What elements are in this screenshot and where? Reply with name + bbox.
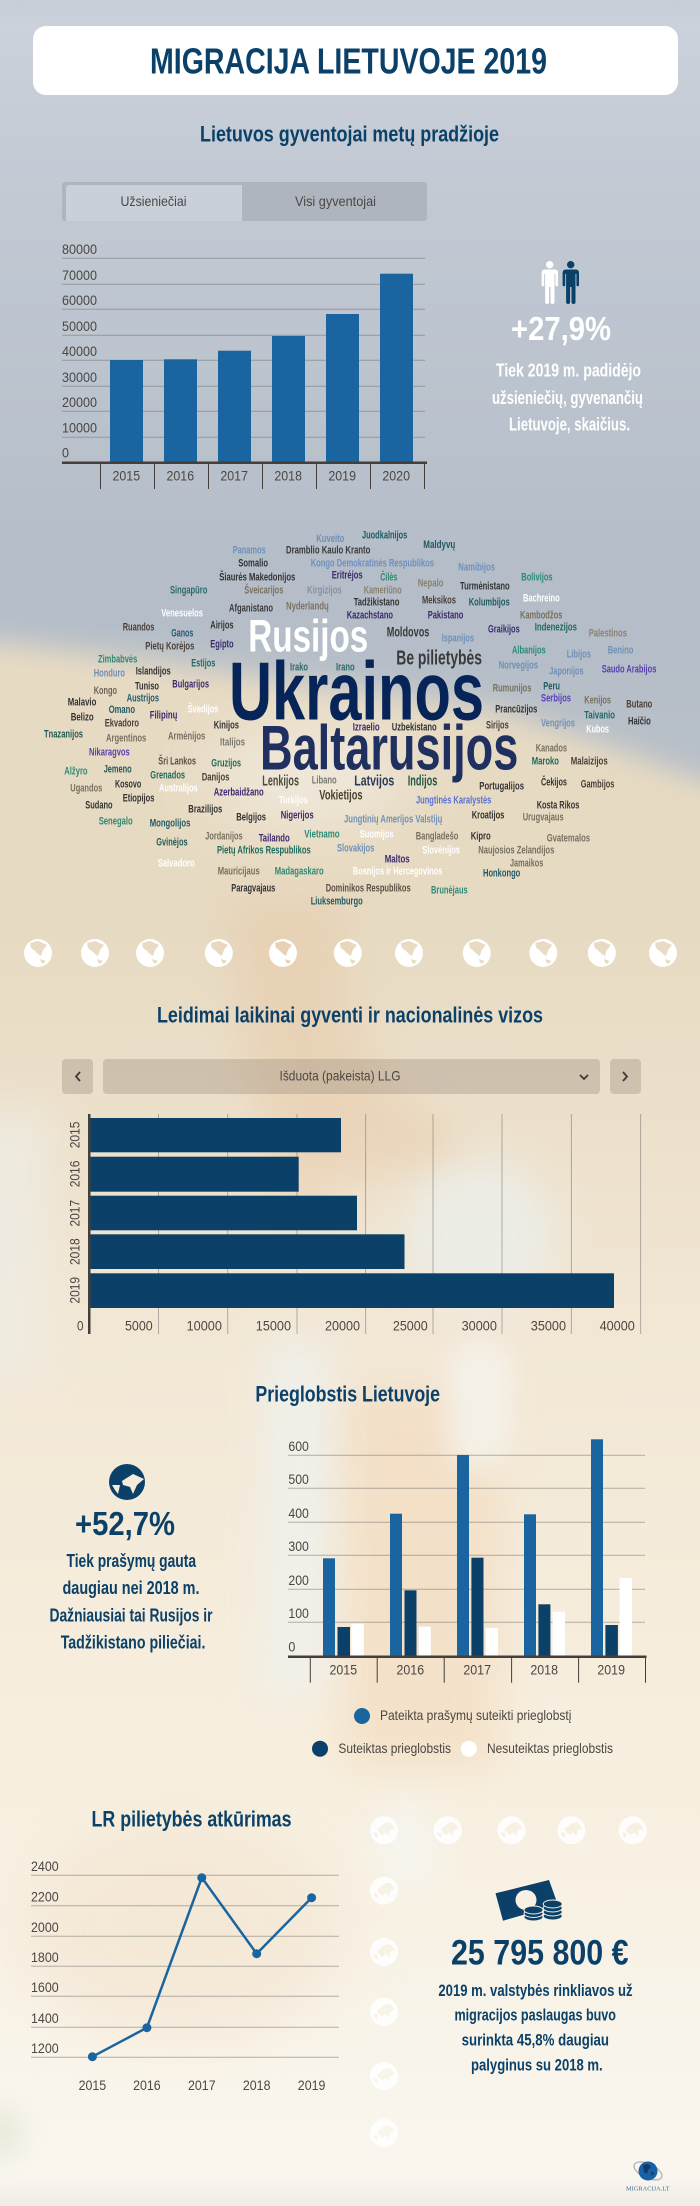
bar chart: residents: 0 <box>62 445 69 461</box>
line chart: citizenship: 2200 <box>31 1888 59 1904</box>
icons: globe row <box>24 939 677 967</box>
word cloud: nationalities: Kenijos <box>584 695 611 707</box>
line chart: citizenship: 2015 <box>79 2077 106 2093</box>
line chart: citizenship <box>31 1858 339 2093</box>
bar chart: residents: 50000 <box>62 318 97 334</box>
word cloud: nationalities: Kambodžos <box>520 610 562 622</box>
word cloud: nationalities: Nepalo <box>418 578 444 590</box>
word cloud: nationalities: Paragvajaus <box>231 883 275 895</box>
callout: 25 795 800 €: 2019 m. valstybės rinkliavos už <box>438 1981 633 2000</box>
bar chart: residents: 10000 <box>62 420 97 436</box>
callout: +52,7% <box>50 1505 212 1653</box>
word cloud: nationalities: Turmėnistano <box>460 581 510 593</box>
bar chart: asylum: 300 <box>288 1538 309 1554</box>
line chart: citizenship: 2019 <box>298 2077 326 2093</box>
word cloud: nationalities: Jamaikos <box>510 858 543 870</box>
word cloud: nationalities: Serbijos <box>541 693 571 705</box>
callout: +27,9%: Lietuvoje, skaičius. <box>509 415 630 435</box>
word cloud: nationalities: Bangladešo <box>416 831 459 843</box>
bar chart: asylum: 200 <box>288 1572 309 1588</box>
word cloud: nationalities: Gambijos <box>581 779 614 791</box>
bar chart: permits: 2016 <box>66 1160 82 1187</box>
word cloud: nationalities: Ugandos <box>70 783 102 795</box>
word cloud: nationalities: Malavio <box>68 697 97 709</box>
line chart: citizenship: 2018 <box>243 2077 271 2093</box>
word cloud: nationalities: Airijos <box>210 620 234 632</box>
callout: +52,7%: Dažniausiai tai Rusijos ir <box>50 1606 212 1626</box>
word cloud: nationalities: Latvijos <box>354 773 394 790</box>
bar chart: permits: 30000 <box>462 1317 497 1333</box>
bar chart: residents: 70000 <box>62 267 97 283</box>
word cloud: nationalities: Jungtinių Amerijos Valstijų <box>344 814 442 826</box>
callout: +52,7%: Tadžikistano piliečiai. <box>61 1633 205 1653</box>
word cloud: nationalities: Sudano <box>85 800 113 812</box>
word cloud: nationalities: Indijos <box>408 773 437 790</box>
word cloud: nationalities: Vengrijos <box>541 718 575 730</box>
word cloud: nationalities: Kongo Demokratinės Respublikos <box>311 558 434 570</box>
word cloud: nationalities: Austrijos <box>127 693 159 705</box>
legend: asylum: Nesuteiktas prieglobstis <box>487 1740 613 1756</box>
icon: dark globe <box>109 1464 145 1500</box>
bar chart: asylum: 600 <box>288 1438 309 1454</box>
word cloud: nationalities: Norvegijos <box>499 660 538 672</box>
word cloud: nationalities: Grenados <box>150 770 185 782</box>
legend: asylum: Pateikta prašymų suteikti prieglobstį <box>380 1707 571 1723</box>
bar chart: residents: 2019 <box>328 467 356 483</box>
word cloud: nationalities: Senegalo <box>99 816 133 828</box>
bar chart: permits: 15000 <box>256 1317 291 1333</box>
word cloud: nationalities: Italijos <box>220 737 245 749</box>
bar chart: asylum: 2017 <box>463 1661 491 1677</box>
tabs: Visi gyventojai <box>295 193 376 209</box>
callout: 25 795 800 €: palyginus su 2018 m. <box>471 2056 603 2075</box>
word cloud: nationalities: Kanados <box>536 743 567 755</box>
word cloud: nationalities: Čilės <box>380 571 397 584</box>
heading: citizenship: LR pilietybės atkūrimas <box>92 1807 292 1832</box>
word cloud: nationalities: Maldyvų <box>423 539 455 551</box>
word cloud: nationalities: Baltarusijos <box>260 713 518 783</box>
word cloud: nationalities: Lenkijos <box>262 773 299 790</box>
bar chart: permits: 5000 <box>125 1317 153 1333</box>
callout: 25 795 800 €: migracijos paslaugas buvo <box>454 2006 616 2025</box>
word cloud: nationalities: Indenezijos <box>535 622 577 634</box>
word cloud: nationalities: Armėnijos <box>168 731 205 743</box>
word cloud: nationalities: Kroatijos <box>472 810 504 822</box>
word cloud: nationalities: Kipro <box>471 831 491 843</box>
callout: 25 795 800 €: surinkta 45,8% daugiau <box>462 2031 609 2050</box>
word cloud: nationalities: Irako <box>290 662 308 674</box>
word cloud: nationalities: Juodkalnijos <box>362 530 407 542</box>
word cloud: nationalities: Irano <box>336 662 355 674</box>
word cloud: nationalities: Tailando <box>259 833 290 845</box>
word cloud: nationalities: Turkijos <box>279 795 308 807</box>
word cloud: nationalities <box>44 530 656 908</box>
bar chart: residents: 2020 <box>382 467 410 483</box>
word cloud: nationalities: Sirijos <box>486 720 509 732</box>
bar chart: asylum <box>288 1438 646 1683</box>
word cloud: nationalities: Uzbekistano <box>392 722 437 734</box>
callout: +52,7%: daugiau nei 2018 m. <box>62 1578 200 1598</box>
word cloud: nationalities: Omano <box>109 704 135 716</box>
word cloud: nationalities: Vokietijos <box>319 786 363 802</box>
word cloud: nationalities: Azerbaidžano <box>214 787 264 799</box>
word cloud: nationalities: Kubos <box>586 724 609 736</box>
word cloud: nationalities: Zimbabvės <box>98 654 137 666</box>
word cloud: nationalities: Brunėjaus <box>431 885 468 897</box>
bar chart: permits: 40000 <box>600 1317 635 1333</box>
word cloud: nationalities: Liuksemburgo <box>311 896 363 908</box>
word cloud: nationalities: Kosta Rikos <box>537 800 579 812</box>
word cloud: nationalities: Jordanijos <box>205 831 243 843</box>
tabs: Užsieniečiai <box>120 193 186 209</box>
word cloud: nationalities: Honkongo <box>483 868 520 880</box>
bar chart: permits: 2017 <box>66 1200 82 1227</box>
word cloud: nationalities: Jungtinės Karalystės <box>416 795 491 807</box>
word cloud: nationalities: Mauricijaus <box>218 866 260 878</box>
word cloud: nationalities: Nyderlandų <box>286 601 329 613</box>
bar chart: residents <box>62 241 427 489</box>
word cloud: nationalities: Brazilijos <box>188 804 222 816</box>
word cloud: nationalities: Filipinų <box>150 710 177 722</box>
bar chart: asylum: 2016 <box>396 1661 424 1677</box>
heading: asylum: Prieglobstis Lietuvoje <box>255 1382 440 1407</box>
legend: asylum: Suteiktas prieglobstis <box>338 1740 451 1756</box>
bar chart: residents: 2017 <box>220 467 248 483</box>
bar chart: asylum: 2019 <box>597 1661 625 1677</box>
word cloud: nationalities: Vietnamo <box>304 829 340 841</box>
title: MIGRACIJA LIETUVOJE 2019 <box>150 40 547 81</box>
word cloud: nationalities: Benino <box>608 645 634 657</box>
word cloud: nationalities: Naujosios Zelandijos <box>478 845 554 857</box>
word cloud: nationalities: Danijos <box>202 772 229 784</box>
word cloud: nationalities: Moldovos <box>387 624 430 640</box>
bar chart: permits: 2015 <box>66 1121 82 1148</box>
word cloud: nationalities: Bachreino <box>523 593 560 605</box>
word cloud: nationalities: Gvatemalos <box>547 833 590 845</box>
word cloud: nationalities: Izraelio <box>353 722 380 734</box>
word cloud: nationalities: Kolumbijos <box>469 597 510 609</box>
word cloud: nationalities: Kinijos <box>214 720 239 732</box>
word cloud: nationalities: Palestinos <box>589 628 627 640</box>
word cloud: nationalities: Albanijos <box>512 645 546 657</box>
word cloud: nationalities: Kazachstano <box>347 610 393 622</box>
word cloud: nationalities: Šiaurės Makedonijos <box>219 571 295 584</box>
bar chart: residents: 2018 <box>274 467 302 483</box>
line chart: citizenship: 2000 <box>31 1919 59 1935</box>
line chart: citizenship: 2017 <box>188 2077 216 2093</box>
word cloud: nationalities: Australijos <box>159 783 198 795</box>
word cloud: nationalities: Maltos <box>385 854 410 866</box>
heading: population: Lietuvos gyventojai metų pradžioje <box>200 122 499 147</box>
word cloud: nationalities: Slovakijos <box>337 843 374 855</box>
word cloud: nationalities: Mongolijos <box>150 818 190 830</box>
callout: +52,7%: +52,7% <box>75 1505 175 1542</box>
word cloud: nationalities: Haičio <box>628 716 651 728</box>
icons: globe frame <box>370 1816 647 2147</box>
word cloud: nationalities: Panamos <box>233 545 266 557</box>
bar chart: residents: 30000 <box>62 369 97 385</box>
line chart: citizenship: 1800 <box>31 1949 59 1965</box>
word cloud: nationalities: Prancūzijos <box>495 704 537 716</box>
callout: +27,9%: Tiek 2019 m. padidėjo <box>496 361 641 381</box>
line chart: citizenship: 2016 <box>133 2077 161 2093</box>
word cloud: nationalities: Čekijos <box>541 776 567 789</box>
bar chart: residents: 80000 <box>62 241 97 257</box>
word cloud: nationalities: Peru <box>543 681 560 693</box>
word cloud: nationalities: Somalio <box>238 558 268 570</box>
word cloud: nationalities: Bolivijos <box>521 572 553 584</box>
word cloud: nationalities: Taivanio <box>584 710 615 722</box>
word cloud: nationalities: Namibijos <box>458 562 495 574</box>
word cloud: nationalities: Bosnijos ir Hercegovinos <box>353 866 442 878</box>
word cloud: nationalities: Bulgarijos <box>172 679 209 691</box>
word cloud: nationalities: Gruzijos <box>211 758 241 770</box>
bar chart: permits: 10000 <box>187 1317 222 1333</box>
word cloud: nationalities: Butano <box>626 699 652 711</box>
word cloud: nationalities: Graikijos <box>488 624 520 636</box>
bar chart: permits: 2019 <box>66 1277 82 1304</box>
callout: +27,9%: užsieniečių, gyvenančių <box>492 388 643 408</box>
line chart: citizenship: 1400 <box>31 2010 59 2026</box>
icon: people <box>542 261 579 304</box>
line chart: citizenship: 2400 <box>31 1858 59 1874</box>
word cloud: nationalities: Kirgizijos <box>307 585 342 597</box>
word cloud: nationalities: Suomijos <box>360 829 394 841</box>
word cloud: nationalities: Ekvadoro <box>105 718 139 730</box>
word cloud: nationalities: Pietų Afrikos Respublikos <box>217 845 311 857</box>
word cloud: nationalities: Rusijos <box>248 611 368 662</box>
word cloud: nationalities: Ispanijos <box>442 633 474 645</box>
word cloud: nationalities: Dramblio Kaulo Kranto <box>286 545 370 557</box>
word cloud: nationalities: Gvinėjos <box>156 837 188 849</box>
selector controls: Išduota (pakeista) LLG <box>280 1068 400 1084</box>
bar chart: asylum: 0 <box>288 1639 296 1655</box>
bar chart: residents: 2015 <box>112 467 140 483</box>
logo: Migracija.lt <box>626 2158 670 2193</box>
icon: banknote and coins <box>496 1880 562 1921</box>
callout: 25 795 800 € <box>438 1933 633 2075</box>
word cloud: nationalities: Madagaskaro <box>275 866 324 878</box>
word cloud: nationalities: Šveicarijos <box>244 584 283 597</box>
word cloud: nationalities: Meksikos <box>422 595 456 607</box>
word cloud: nationalities: Slovėnijos <box>422 845 460 857</box>
word cloud: nationalities: Kosovo <box>115 779 141 791</box>
word cloud: nationalities: Ukrainos <box>229 644 484 737</box>
word cloud: nationalities: Švedijos <box>188 703 218 716</box>
word cloud: nationalities: Eritrėjos <box>332 570 363 582</box>
word cloud: nationalities: Etiopijos <box>123 793 154 805</box>
word cloud: nationalities: Libano <box>312 775 337 787</box>
word cloud: nationalities: Maroko <box>532 756 559 768</box>
word cloud: nationalities: Islandijos <box>136 666 171 678</box>
callout: +52,7%: Tiek prašymų gauta <box>66 1551 197 1571</box>
bar chart: residents: 40000 <box>62 343 97 359</box>
word cloud: nationalities: Saudo Arabijos <box>602 664 656 676</box>
word cloud: nationalities: Portugalijos <box>479 781 524 793</box>
word cloud: nationalities: Malaizijos <box>571 756 608 768</box>
callout: +27,9% <box>492 310 643 435</box>
word cloud: nationalities: Alžyro <box>64 766 88 778</box>
bar chart: asylum: 2015 <box>330 1661 357 1677</box>
line chart: citizenship: 1600 <box>31 1979 59 1995</box>
line chart: citizenship: 1200 <box>31 2040 59 2056</box>
word cloud: nationalities: Afganistano <box>229 603 273 615</box>
word cloud: nationalities: Pakistano <box>428 610 464 622</box>
word cloud: nationalities: Šri Lankos <box>158 755 196 768</box>
word cloud: nationalities: Tadžikistano <box>354 597 400 609</box>
bar chart: permits: 25000 <box>393 1317 428 1333</box>
bar chart: permits: 35000 <box>531 1317 566 1333</box>
word cloud: nationalities: Urugvajaus <box>523 812 564 824</box>
bar chart: residents: 2016 <box>166 467 194 483</box>
bar chart: asylum: 400 <box>288 1505 309 1521</box>
word cloud: nationalities: Be pilietybės <box>396 648 482 670</box>
word cloud: nationalities: Japonijos <box>549 666 584 678</box>
selector controls <box>62 1059 641 1094</box>
word cloud: nationalities: Belgijos <box>236 812 266 824</box>
logo: Migracija.lt: MIGRACIJA.LT <box>626 2187 670 2193</box>
word cloud: nationalities: Tuniso <box>135 681 159 693</box>
callout: 25 795 800 €: 25 795 800 € <box>451 1933 629 1972</box>
word cloud: nationalities: Ruandos <box>123 622 154 634</box>
bar chart: permits <box>66 1114 641 1334</box>
legend: asylum <box>312 1707 613 1757</box>
word cloud: nationalities: Nigerijos <box>281 810 314 822</box>
word cloud: nationalities: Libijos <box>567 649 591 661</box>
word cloud: nationalities: Pietų Korėjos <box>145 641 194 653</box>
callout: +27,9%: +27,9% <box>511 310 611 347</box>
word cloud: nationalities: Kuveito <box>316 533 344 545</box>
word cloud: nationalities: Nikaragvos <box>89 747 130 759</box>
title <box>33 26 678 95</box>
word cloud: nationalities: Argentinos <box>106 733 146 745</box>
word cloud: nationalities: Dominikos Respublikos <box>326 883 411 895</box>
bar chart: asylum: 500 <box>288 1471 309 1487</box>
word cloud: nationalities: Belizo <box>71 712 94 724</box>
word cloud: nationalities: Estijos <box>191 658 215 670</box>
word cloud: nationalities: Ganos <box>171 628 193 640</box>
bar chart: residents: 20000 <box>62 394 97 410</box>
word cloud: nationalities: Kameriūno <box>364 585 402 597</box>
word cloud: nationalities: Egipto <box>210 639 234 651</box>
word cloud: nationalities: Singapūro <box>170 585 207 597</box>
word cloud: nationalities: Venesuelos <box>161 608 203 620</box>
bar chart: permits: 0 <box>77 1317 84 1333</box>
tabs <box>62 182 427 221</box>
word cloud: nationalities: Honduro <box>94 668 125 680</box>
word cloud: nationalities: Rumunijos <box>493 683 531 695</box>
word cloud: nationalities: Jemeno <box>104 764 132 776</box>
word cloud: nationalities: Salvadoro <box>158 858 195 870</box>
word cloud: nationalities: Tnazanijos <box>44 729 83 741</box>
bar chart: asylum: 100 <box>288 1605 309 1621</box>
bar chart: asylum: 2018 <box>530 1661 558 1677</box>
bar chart: permits: 20000 <box>325 1317 360 1333</box>
word cloud: nationalities: Kongo <box>94 685 117 697</box>
bar chart: permits: 2018 <box>66 1238 82 1265</box>
heading: permits: Leidimai laikinai gyventi ir nacionalinės vizos <box>157 1003 543 1028</box>
bar chart: residents: 60000 <box>62 292 97 308</box>
